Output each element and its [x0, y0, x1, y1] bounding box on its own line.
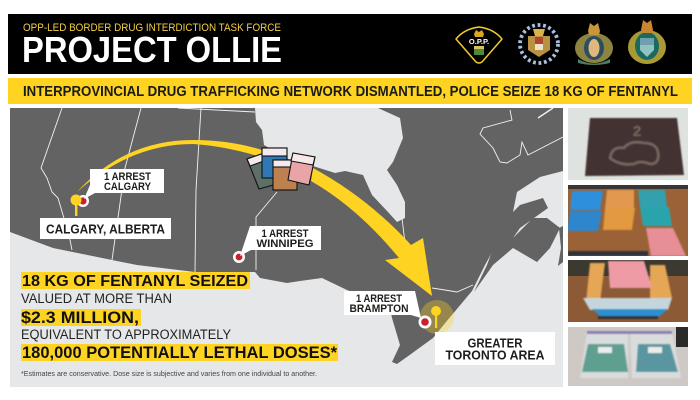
- header kicker: OPP-LED BORDER DRUG INTERDICTION TASK FORCE: [23, 22, 281, 34]
- icon: Brampton arrest marker: [418, 316, 432, 328]
- icon: Calgary police badge: [520, 25, 558, 63]
- photo: stamped fentanyl brick: [568, 108, 688, 180]
- title: PROJECT OLLIE: [22, 29, 282, 70]
- callout: 1 arrest Brampton: 1 ARREST: [356, 293, 402, 305]
- icon: OPP badge: [456, 27, 502, 63]
- callout: 1 arrest Brampton: [344, 291, 421, 318]
- icon: Winnipeg arrest marker: [233, 251, 245, 263]
- highlight: Greater Toronto Area: [420, 300, 454, 334]
- text block: seizure statistics: *Estimates are conservative. Dose size is subjective and varies from one individual to another.: [21, 371, 317, 378]
- headline banner: [8, 78, 692, 104]
- callout: 1 arrest Calgary: CALGARY: [104, 181, 152, 193]
- map borders: [41, 108, 563, 292]
- label: Greater Toronto Area: GREATER: [468, 336, 523, 350]
- icon: OPP badge: O.P.P.: [469, 37, 489, 46]
- icon: RCMP badge: [575, 23, 613, 65]
- label: Greater Toronto Area: [435, 332, 555, 365]
- text block: seizure statistics: 180,000 POTENTIALLY LETHAL DOSES*: [22, 344, 338, 362]
- callout: 1 arrest Calgary: 1 ARREST: [104, 171, 151, 183]
- text block: seizure statistics: $2.3 MILLION,: [21, 309, 139, 327]
- icon: drug packets: [247, 148, 315, 190]
- text block: seizure statistics: VALUED AT MORE THAN: [21, 291, 172, 306]
- icon: Calgary location pin: [70, 194, 82, 216]
- map land: [10, 108, 563, 364]
- panel: map: [10, 108, 563, 387]
- callout: 1 arrest Winnipeg: [240, 226, 321, 256]
- callout: 1 arrest Winnipeg: WINNIPEG: [256, 238, 314, 250]
- label: Calgary, Alberta: [40, 218, 171, 239]
- arrow: large yellow arrow: [311, 168, 432, 296]
- callout: 1 arrest Winnipeg: 1 ARREST: [262, 228, 309, 240]
- text block: seizure statistics: 18 KG OF FENTANYL SEIZED: [22, 273, 248, 290]
- icon: Calgary arrest marker: [78, 195, 89, 207]
- photo: stamped fentanyl brick: 2: [633, 123, 641, 140]
- callout: 1 arrest Calgary: [84, 169, 164, 199]
- label: Calgary, Alberta: CALGARY, ALBERTA: [46, 222, 166, 236]
- text block: seizure statistics: [21, 272, 338, 378]
- arrow: Calgary to Toronto, thin arc: [77, 140, 262, 192]
- photo: coloured packages on table: [567, 185, 688, 256]
- text block: seizure statistics: EQUIVALENT TO APPROXIMATELY: [21, 327, 231, 342]
- photo: stacked packages on scale: [568, 260, 688, 322]
- icon: Toronto location pin: [431, 306, 441, 328]
- photo: teal packages in bags: [568, 327, 688, 386]
- header band: [8, 14, 692, 74]
- callout: 1 arrest Brampton: BRAMPTON: [350, 303, 409, 315]
- label: Greater Toronto Area: TORONTO AREA: [446, 348, 545, 362]
- icon: Winnipeg police badge: [628, 20, 666, 64]
